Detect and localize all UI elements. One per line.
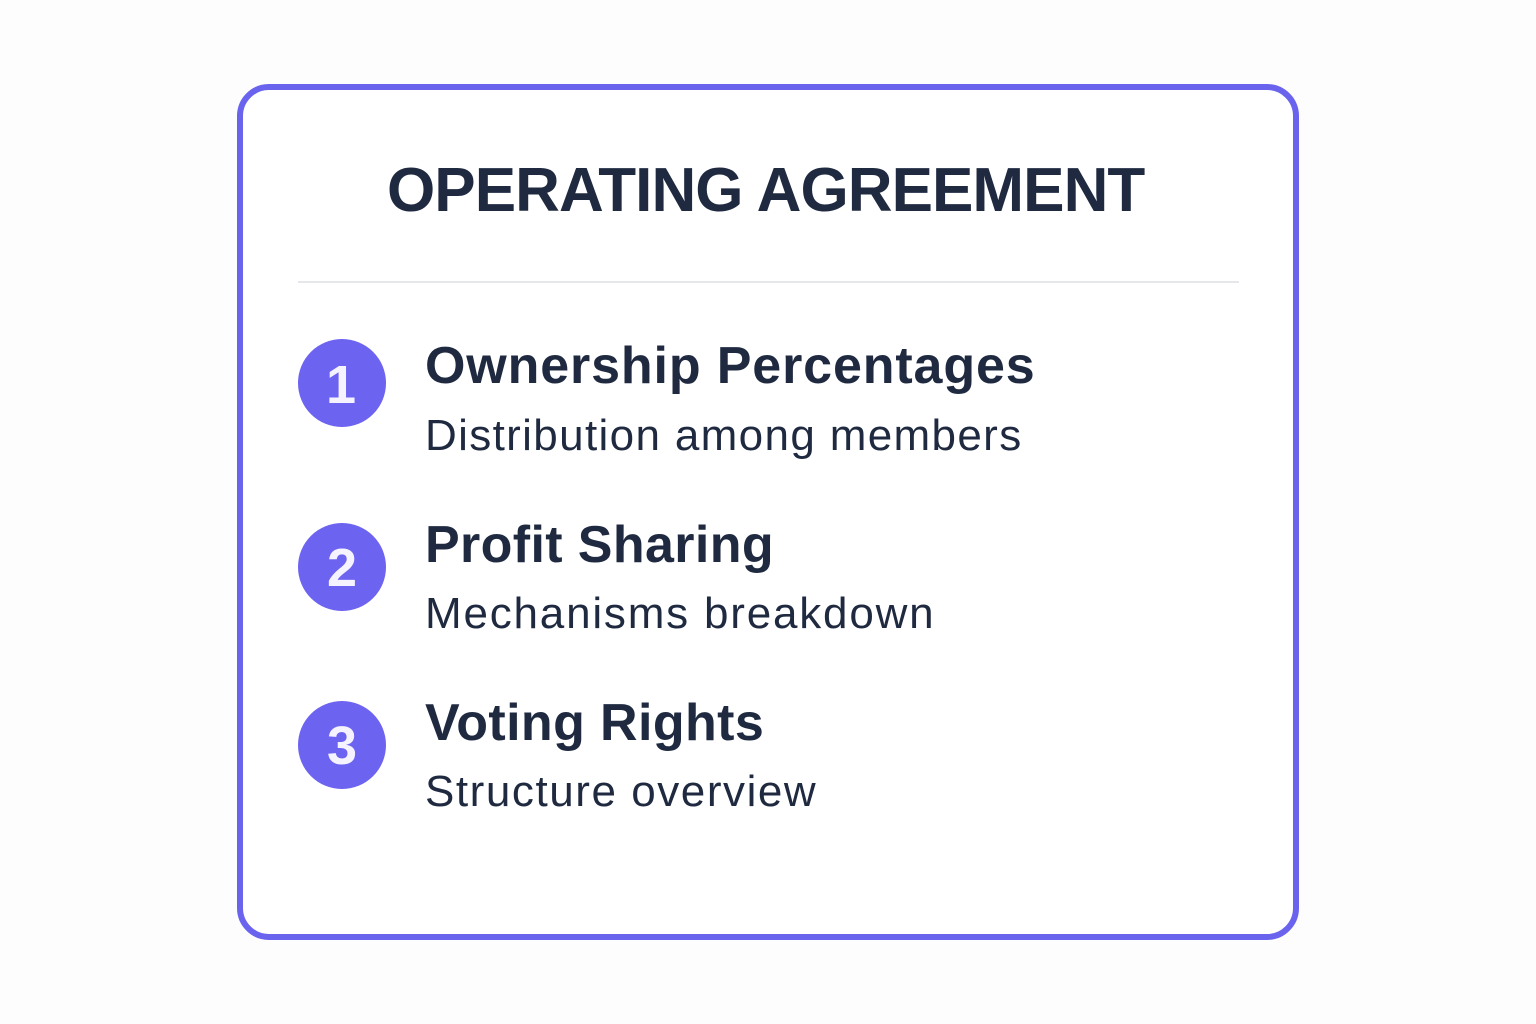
heading: profit sharing: Profit Sharing — [425, 516, 774, 574]
icon: number 2 badge: 2 — [327, 538, 357, 598]
heading: ownership percentages: Ownership Percentages — [425, 337, 1036, 395]
icon: number 2 badge — [298, 523, 386, 611]
panel: operating agreement card — [237, 84, 1299, 940]
heading: voting rights: Voting Rights — [425, 694, 764, 752]
text: structure overview: Structure overview — [425, 767, 817, 816]
title: OPERATING AGREEMENT — [387, 156, 1144, 225]
icon: number 1 badge — [298, 339, 386, 427]
text: distribution among members: Distribution among members — [425, 411, 1023, 460]
text: mechanisms breakdown: Mechanisms breakdown — [425, 589, 935, 638]
icon: number 3 badge — [298, 701, 386, 789]
icon: number 3 badge: 3 — [327, 716, 357, 776]
icon: number 1 badge: 1 — [326, 355, 356, 415]
